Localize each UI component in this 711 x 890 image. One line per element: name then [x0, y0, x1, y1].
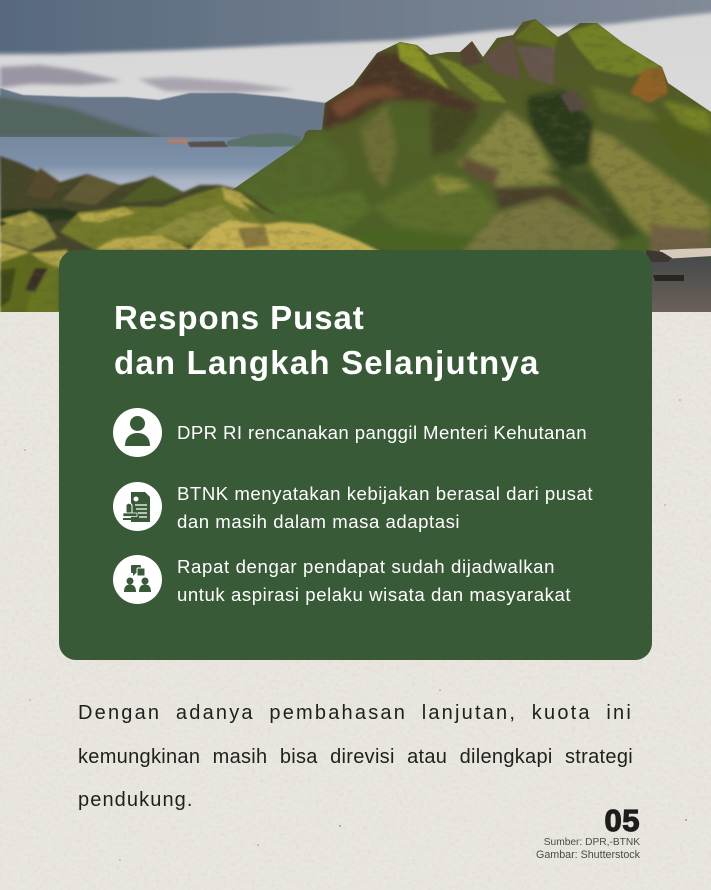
item 3 text — [177, 556, 571, 605]
source credits: Sumber: DPR,-BTNK — [544, 837, 640, 848]
item 3 text: Rapat dengar pendapat sudah dijadwalkan — [177, 556, 555, 577]
heading: Respons Pusat — [114, 299, 365, 336]
pink clouds — [0, 65, 295, 93]
item 1 text: DPR RI rencanakan panggil Menteri Kehutanan — [177, 422, 587, 443]
closing paragraph: Dengan adanya pembahasan lanjutan, kuota ini — [78, 702, 633, 724]
page number: 05 — [605, 803, 640, 838]
closing paragraph: pendukung. — [78, 789, 194, 811]
heading — [114, 299, 540, 381]
sky — [0, 0, 711, 190]
small islands — [168, 130, 315, 147]
source credits: Gambar: Shutterstock — [536, 849, 640, 861]
item 1: icon person — [113, 408, 162, 457]
closing paragraph — [78, 702, 633, 811]
sea — [0, 137, 330, 207]
source credits — [536, 837, 640, 861]
dark cloud band — [0, 0, 711, 54]
item 2 text: BTNK menyatakan kebijakan berasal dari pusat — [177, 483, 593, 504]
left hills — [0, 156, 390, 315]
mountain surface patches — [235, 19, 711, 257]
closing paragraph: kemungkinan masih bisa direvisi atau dilengkapi strategi — [78, 746, 633, 768]
item 2 text: dan masih dalam masa adaptasi — [177, 510, 460, 532]
item 2 text — [177, 483, 593, 532]
panel: green content card — [59, 250, 652, 660]
photo: Padar island mountain landscape — [0, 0, 711, 312]
item 3: icon two people with speech bubbles — [113, 555, 162, 604]
far mountains — [0, 88, 326, 138]
item 2: icon document and stamp — [113, 482, 162, 531]
item 3 text: untuk aspirasi pelaku wisata dan masyarakat — [177, 584, 571, 604]
heading: dan Langkah Selanjutnya — [114, 344, 540, 381]
main mountain — [225, 19, 711, 260]
right shore — [648, 257, 711, 312]
